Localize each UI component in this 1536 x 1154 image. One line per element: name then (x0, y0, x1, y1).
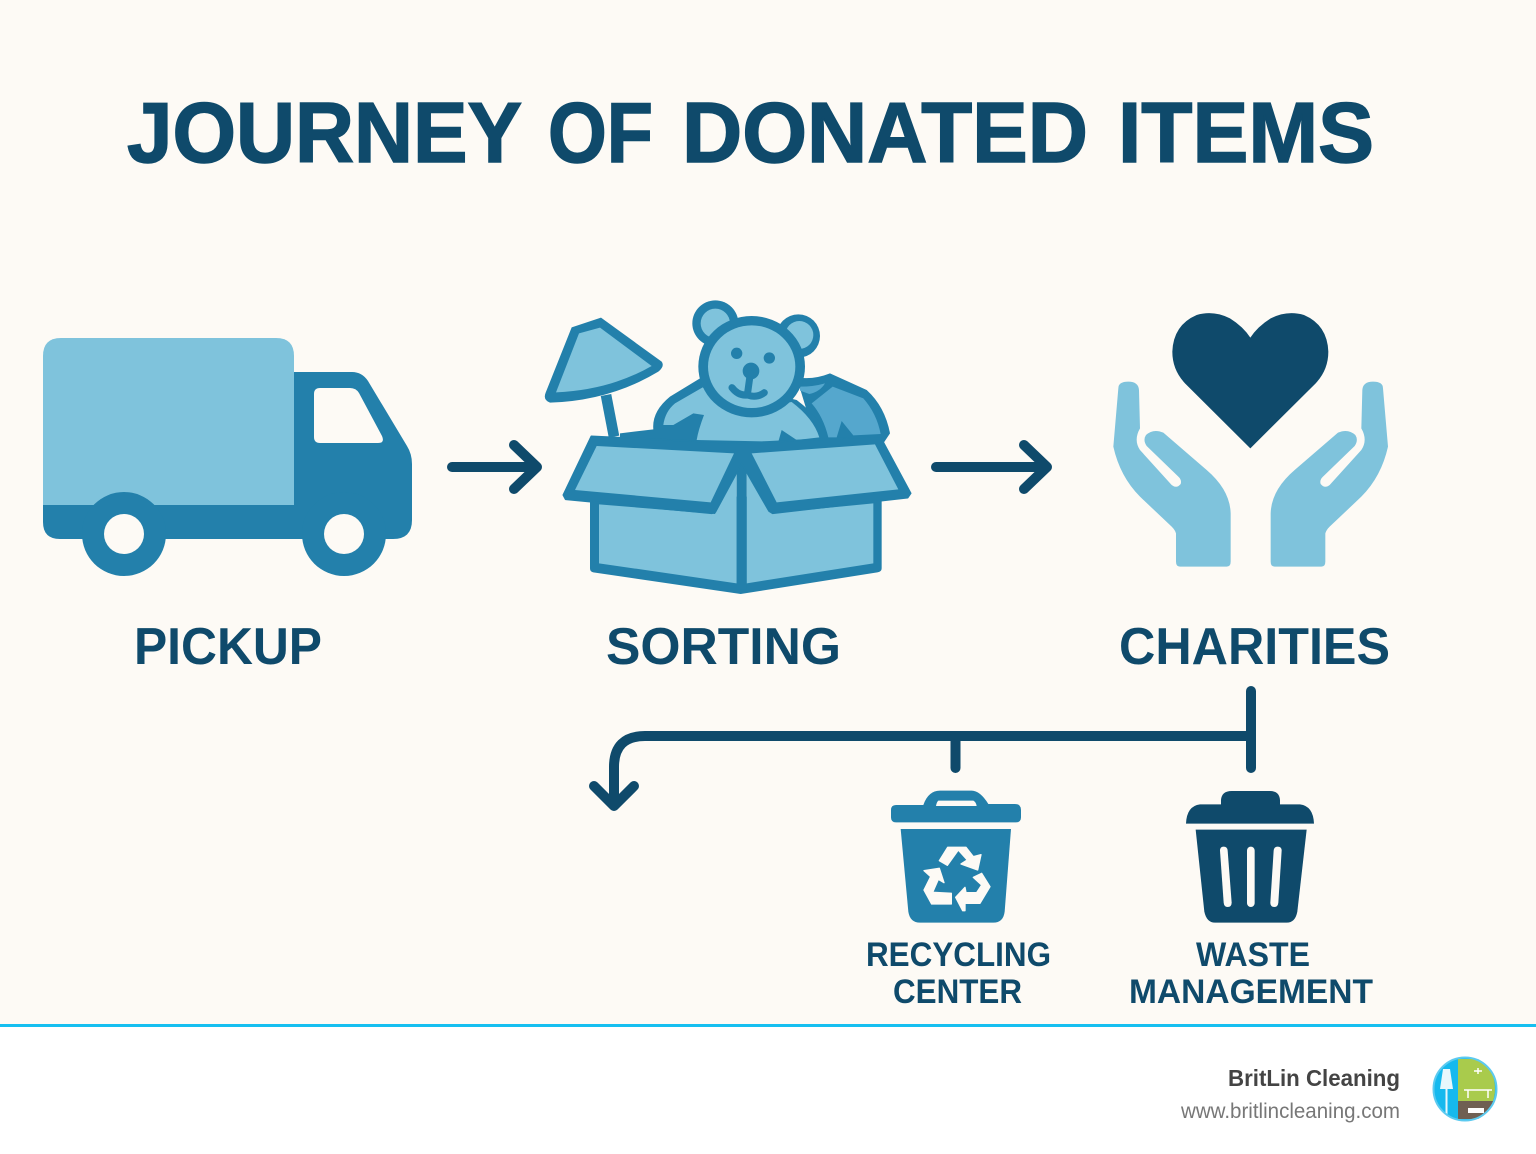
icon: pickup truck (43, 338, 412, 576)
icon: waste bin (1186, 791, 1314, 923)
arrow: pickup to sorting (452, 445, 537, 489)
label: pickup: PICKUP (134, 618, 322, 676)
label: recycling center: RECYCLING (866, 936, 1051, 974)
icon: recycling bin (891, 791, 1021, 923)
brand name: BritLin Cleaning (1228, 1065, 1400, 1091)
label: waste management: MANAGEMENT (1129, 973, 1373, 1011)
label: recycling center (866, 936, 1051, 1011)
label: waste management (1129, 936, 1373, 1011)
clothing behind bear (797, 373, 890, 443)
teddy bear (620, 300, 830, 443)
left hand (1113, 382, 1231, 567)
cardboard box (563, 436, 911, 594)
website: www.britlincleaning.com (1180, 1100, 1400, 1123)
label: waste management: WASTE (1196, 936, 1310, 974)
footer band (0, 1024, 1536, 1154)
label: recycling center: CENTER (893, 973, 1022, 1011)
arrow: sorting to charities (936, 445, 1047, 489)
title: JOURNEY (127, 86, 522, 181)
icon: recycling symbol (924, 847, 990, 911)
logo (1433, 1057, 1497, 1121)
branching connector arrow (594, 691, 1251, 806)
right hand (1271, 382, 1388, 567)
icon: hands holding heart (1113, 313, 1388, 567)
lamp (545, 318, 663, 437)
label: sorting: SORTING (606, 618, 841, 676)
title: DONATED (682, 86, 1088, 181)
heart (1172, 313, 1328, 448)
icon: open box with donated items (545, 300, 911, 594)
title (127, 86, 1374, 181)
title: ITEMS (1118, 86, 1374, 181)
title: OF (548, 86, 653, 181)
label: charities: CHARITIES (1119, 618, 1390, 676)
